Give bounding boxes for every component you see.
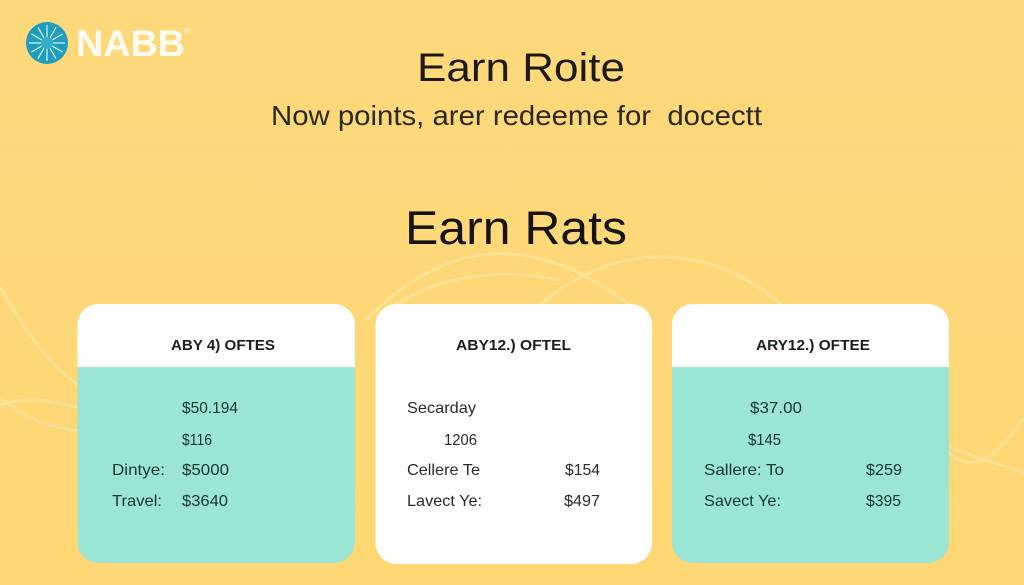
panel: card 1: [78, 304, 355, 563]
card 3 body: [672, 304, 949, 563]
card 3 rows: Savect Ye:: [704, 493, 781, 510]
card 3 rows: Sallere: To: [704, 462, 784, 479]
section heading: Earn Rats: [405, 201, 627, 254]
card 1 rows: $50.194: [182, 400, 238, 417]
card 1 rows: $3640: [182, 493, 228, 510]
icon: logo sunburst: [26, 22, 68, 64]
card 1 rows: Dintye:: [112, 462, 165, 479]
card 3 rows: $395: [866, 493, 901, 510]
card 1 rows: [112, 400, 238, 510]
card 1 rows: $116: [182, 432, 212, 449]
card 2 rows: Lavect Ye:: [407, 493, 482, 510]
card 1 rows: $5000: [182, 462, 229, 479]
card 1 heading: ABY 4) OFTES: [171, 337, 275, 354]
registered mark: ®: [184, 27, 190, 36]
card 3 rows: [704, 400, 902, 510]
card 1 rows: Travel:: [112, 493, 162, 510]
card 3 header: [672, 304, 949, 367]
card 2 heading: ABY12.) OFTEL: [456, 337, 571, 354]
card 2 rows: [407, 400, 600, 510]
card 1 body: [78, 304, 355, 563]
logo wordmark: NABB: [76, 23, 185, 64]
card 2 rows: Cellere Te: [407, 462, 480, 479]
card 2 rows: 1206: [444, 432, 477, 449]
card 2 rows: $154: [565, 462, 600, 479]
card 2 body: [376, 304, 652, 564]
title: Earn Roite: [417, 46, 625, 90]
panel: card 2: [376, 304, 652, 564]
card 2 rows: $497: [564, 493, 600, 510]
panel: card 3: [672, 304, 949, 563]
logo: NABB: [26, 22, 190, 64]
card 2 rows: Secarday: [407, 400, 476, 417]
card 1 header: [78, 304, 355, 367]
card 3 rows: $259: [866, 462, 902, 479]
subtitle: Now points, arer redeeme for docectt: [271, 100, 762, 131]
card 3 heading: ARY12.) OFTEE: [756, 337, 870, 354]
card 3 rows: $37.00: [750, 400, 802, 417]
card 3 rows: $145: [748, 432, 781, 449]
